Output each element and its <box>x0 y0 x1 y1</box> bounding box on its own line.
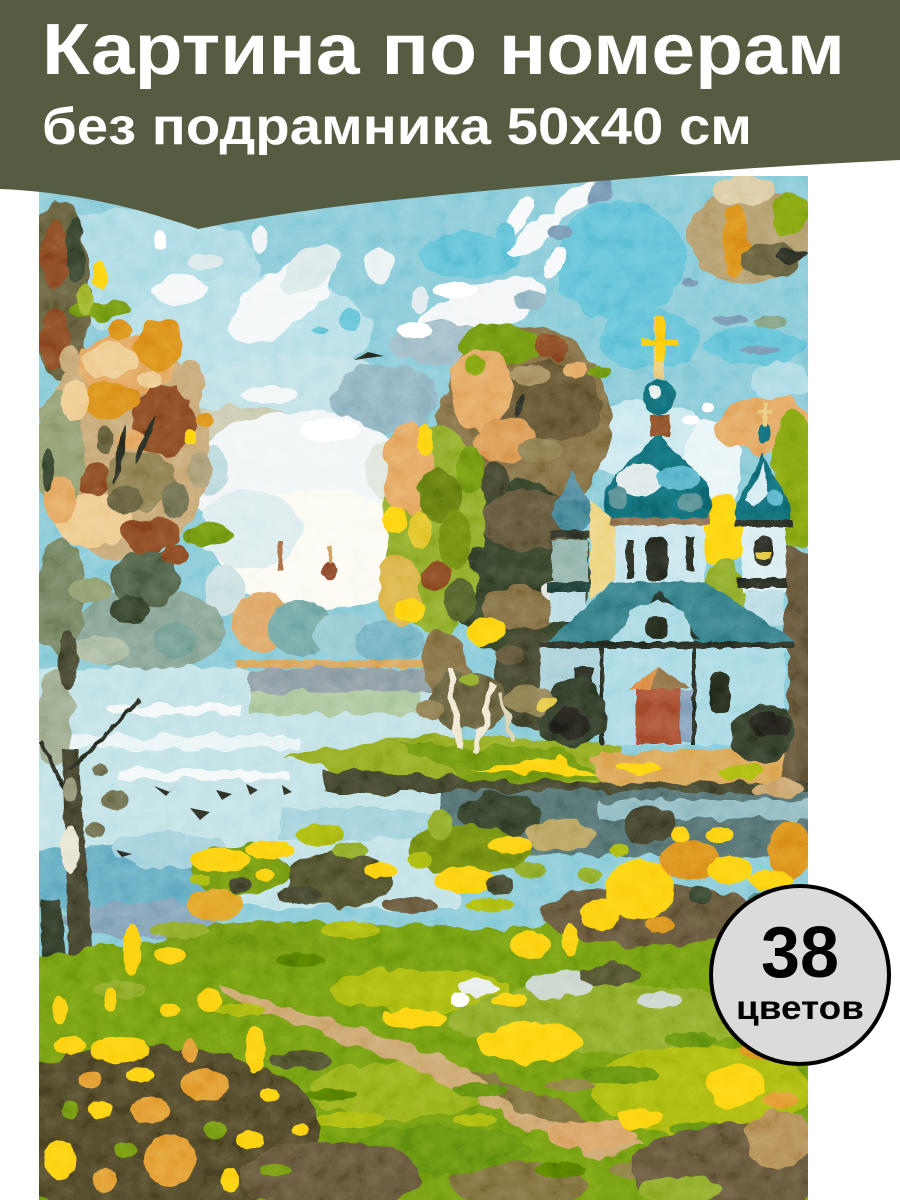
main roof <box>548 582 796 642</box>
door with porch <box>628 667 692 744</box>
meadow dabs <box>94 921 800 1182</box>
pond and shore under church <box>285 735 820 855</box>
bushes beside church <box>508 679 795 765</box>
paint patch mottling <box>39 176 808 1200</box>
centre tree leaf dabs <box>383 355 612 720</box>
side wings <box>540 645 785 745</box>
cream wall strip <box>590 500 615 600</box>
top right foliage <box>688 176 812 283</box>
yellow autumn bushes <box>44 809 812 1192</box>
left tree leaf dabs <box>42 284 214 690</box>
right small dome tower <box>735 402 793 625</box>
colour count badge <box>711 886 889 1064</box>
main onion dome <box>604 432 711 518</box>
sky and clouds <box>20 176 810 610</box>
colour count badge: цветов <box>736 989 864 1026</box>
gold cross <box>641 316 679 378</box>
sky brush dabs <box>154 191 786 615</box>
left bare trees <box>39 698 142 958</box>
river water <box>0 668 460 938</box>
centre trees <box>378 323 610 750</box>
neck and top dome <box>650 415 670 437</box>
title: Картина по номерам <box>42 10 845 90</box>
church <box>540 316 796 745</box>
painting: church by the river in autumn <box>0 176 830 1200</box>
left autumn tree foliage <box>30 200 235 770</box>
colour count badge: 38 <box>761 913 839 993</box>
header banner <box>0 0 900 229</box>
main drum <box>610 515 710 582</box>
right trees behind church <box>704 394 808 782</box>
dark undergrowth <box>0 825 830 1200</box>
birds <box>116 352 384 857</box>
subtitle: без подрамника 50х40 см <box>42 98 752 156</box>
back left dome <box>546 470 593 622</box>
meadow ground <box>39 919 808 1200</box>
front facade <box>603 600 695 745</box>
distant shore with far church <box>75 540 445 672</box>
